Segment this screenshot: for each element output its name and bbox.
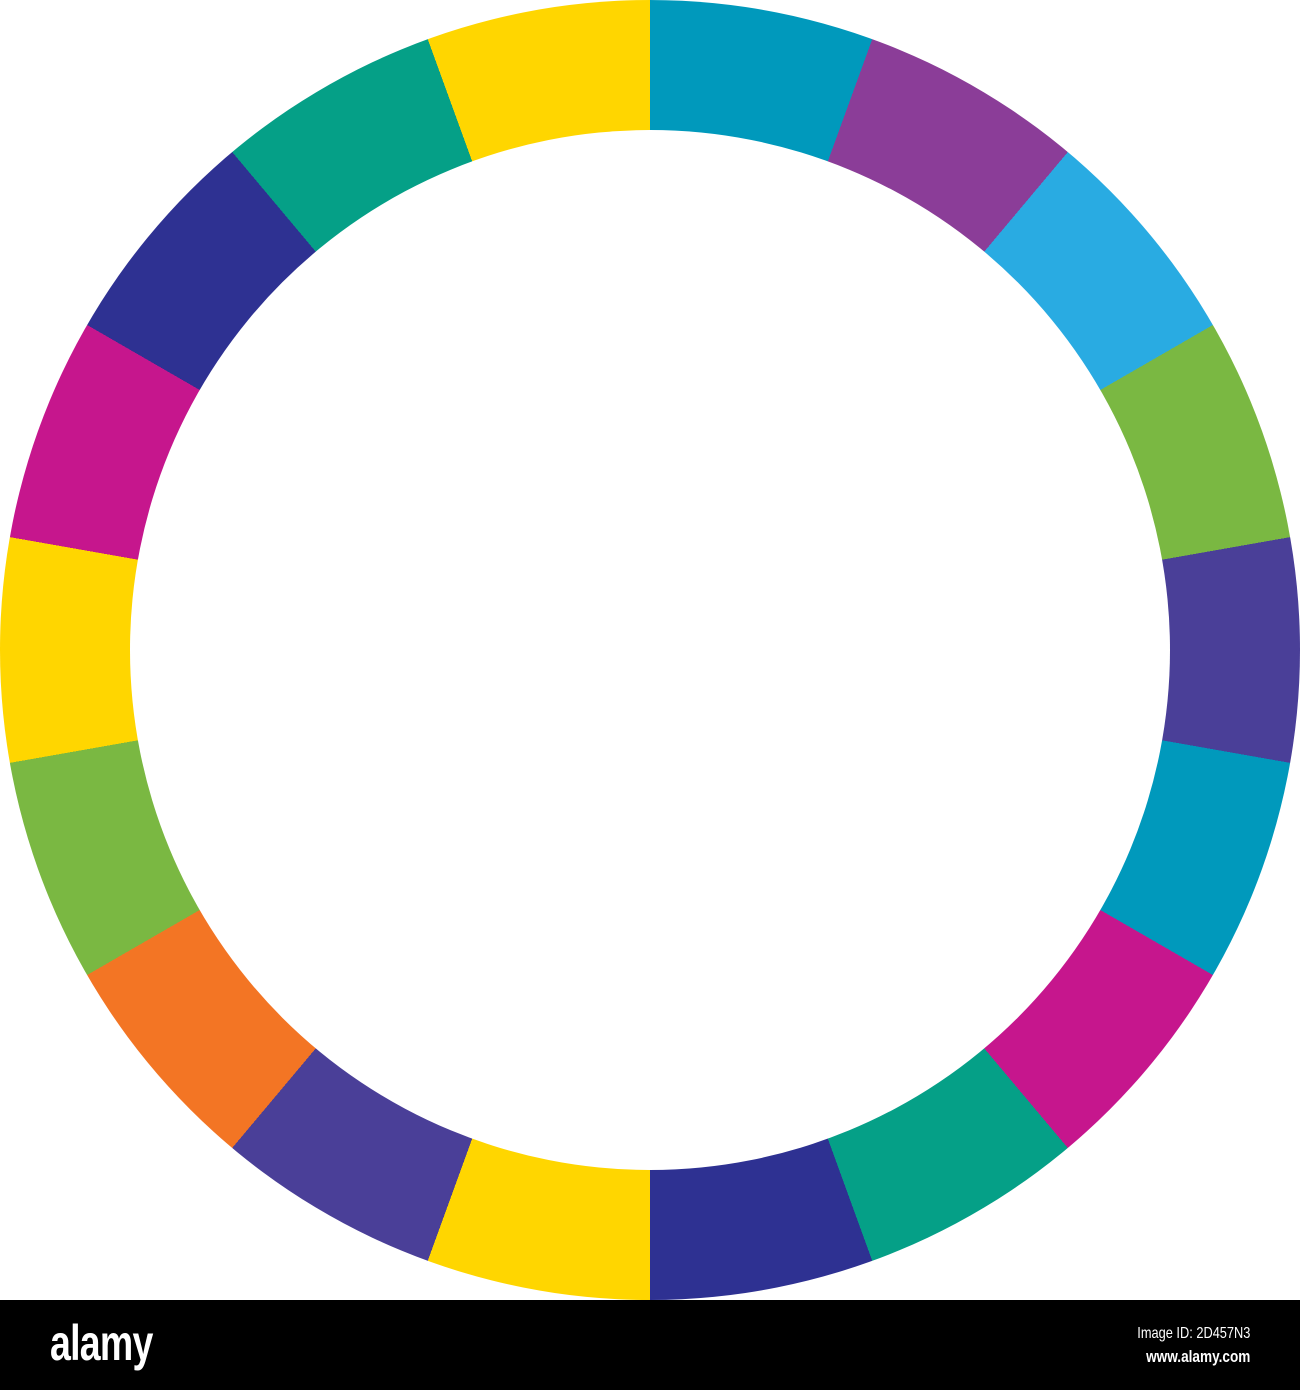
alamy logo: alamy	[50, 1315, 153, 1371]
image id text: www.alamy.com	[1146, 1347, 1250, 1366]
image id text	[1137, 1325, 1250, 1366]
footer bar	[0, 1300, 1300, 1390]
inner white circle	[130, 130, 1170, 1170]
image id text: Image ID: 2D457N3	[1137, 1325, 1250, 1342]
